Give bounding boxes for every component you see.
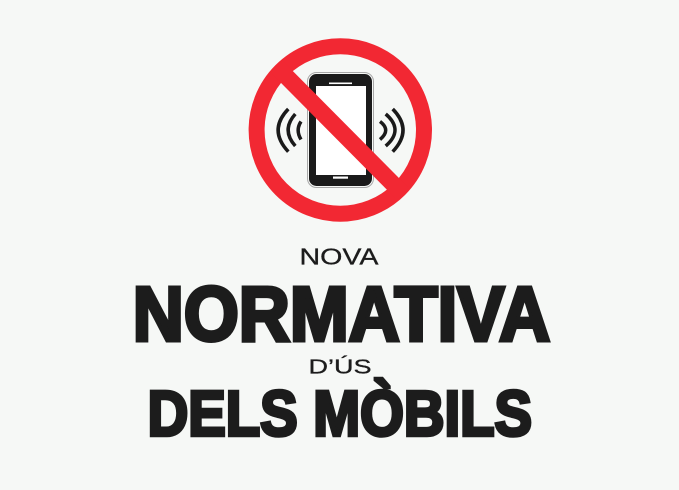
- icon: phone: [308, 72, 374, 188]
- text: NOVA: NOVA: [300, 244, 379, 270]
- icon: left vibration waves: [278, 109, 301, 152]
- icon: no mobile phones sign: [257, 46, 424, 214]
- icon: right vibration waves: [380, 109, 403, 152]
- heading: NORMATIVA: NORMATIVA: [133, 272, 550, 358]
- heading: DELS MÒBILS: DELS MÒBILS: [148, 378, 532, 450]
- icon: red prohibition ring and slash: [257, 46, 424, 214]
- text: D'ÚS: D’ÚS: [308, 355, 372, 378]
